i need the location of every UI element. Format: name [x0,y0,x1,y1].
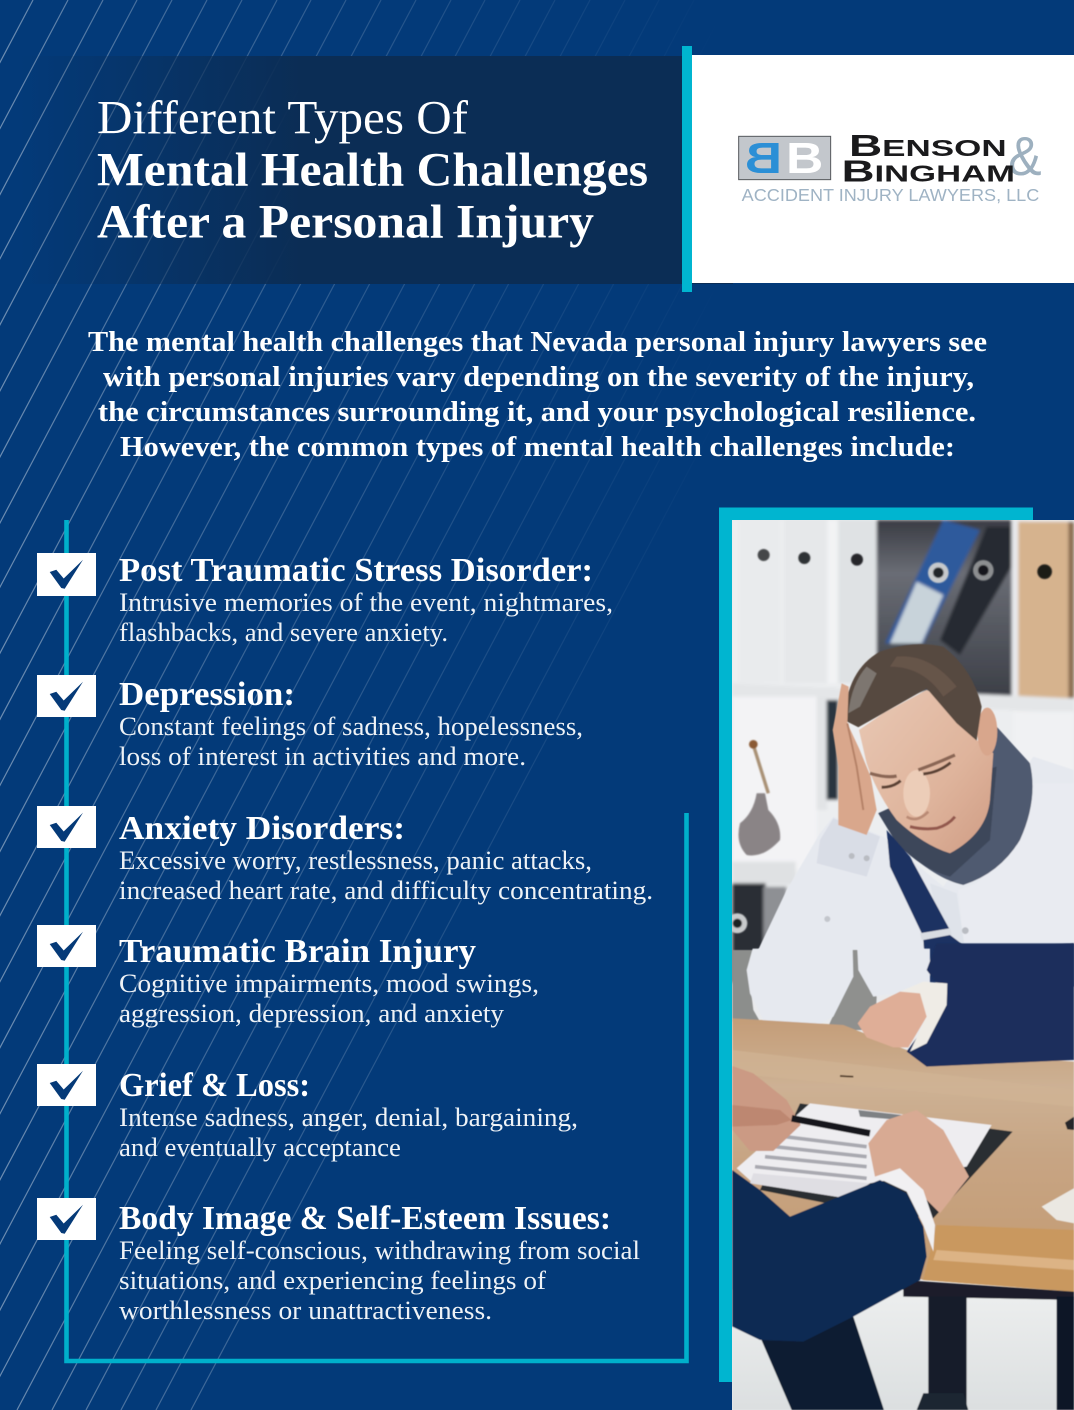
intro paragraph: However, the common types of mental health challenges include: [120,431,955,463]
item: Traumatic Brain Injury: Cognitive impairments, mood swings, [119,968,539,998]
intro paragraph: the circumstances surrounding it, and your psychological resilience. [98,396,976,428]
item: Traumatic Brain Injury: aggression, depression, and anxiety [119,998,505,1028]
shirt cuff [875,1168,935,1252]
checkbox icon [37,553,96,596]
jacket [760,1317,884,1410]
checkbox icon [37,675,96,717]
logo: Benson & Bingham: BINGHAM [842,155,1015,189]
chair background [732,950,760,1022]
item: Body Image & Self-Esteem Issues: Body Image & Self-Esteem Issues: [119,1200,611,1237]
logo: Benson & Bingham: B [786,134,823,183]
logo: Benson & Bingham: B [745,134,782,183]
logo: Benson & Bingham: ACCIDENT INJURY LAWYERS, LLC [742,185,1039,205]
neck brace [878,727,1033,885]
intro paragraph: The mental health challenges that Nevada personal injury lawyers see [88,326,987,358]
item: Post Traumatic Stress Disorder [37,552,613,647]
hair [844,644,982,741]
item: Anxiety Disorders: Anxiety Disorders: [119,810,405,847]
title: Mental Health Challenges [97,144,648,196]
photo: injured man in neck brace with lawyer [727,520,1074,1410]
shirt [758,758,1073,950]
sling [907,943,1074,1067]
item: Depression: Constant feelings of sadness, hopelessness, [119,711,583,741]
item: Body Image & Self-Esteem Issues: worthlessness or unattractiveness. [119,1295,492,1325]
left hand with pen [732,1066,801,1151]
lawyer hand [868,1110,969,1213]
item: Grief & Loss [37,1064,578,1162]
item: Depression: loss of interest in activities and more. [119,741,526,771]
floor [732,1290,1074,1410]
clipboard [760,1103,1013,1218]
table scene [732,943,1074,1410]
title: Different Types Of [97,92,468,144]
item: Body Image & Self-Esteem Issues: situations, and experiencing feelings of [119,1265,546,1295]
item: Body Image & Self-Esteem Issues: Feeling self-conscious, withdrawing from social [119,1235,640,1265]
item: Traumatic Brain Injury: Traumatic Brain Injury [119,933,476,970]
cast [908,981,948,1052]
intro paragraph: with personal injuries vary depending on the severity of the injury, [103,361,974,393]
item: Anxiety Disorders: Excessive worry, restlessness, panic attacks, [119,845,592,875]
item: Depression [37,675,583,771]
logo panel [682,46,1074,292]
strap [887,830,950,937]
shelves background [732,520,1074,987]
item: Post Traumatic Stress Disorder: flashbacks, and severe anxiety. [119,617,448,647]
keyboard and phone [1042,1188,1074,1223]
face [859,690,993,853]
logo: Benson & Bingham: & [1008,125,1042,187]
item: Post Traumatic Stress Disorder: Post Traumatic Stress Disorder: [119,552,593,589]
item: Grief & Loss: Grief & Loss: [119,1067,310,1104]
item: Grief & Loss: and eventually acceptance [119,1132,401,1162]
hand on head [833,683,877,835]
table legs [928,1297,967,1410]
client hand [858,992,927,1047]
intro paragraph [88,326,987,463]
logo: Benson & Bingham [739,125,1042,205]
checkbox icon [37,1198,96,1240]
header panel [0,56,733,284]
item: Grief & Loss: Intense sadness, anger, denial, bargaining, [119,1102,578,1132]
item: Anxiety Disorders [37,806,653,905]
item: Traumatic Brain Injury [37,925,539,1028]
item: Depression: Depression: [119,676,295,713]
item: Post Traumatic Stress Disorder: Intrusive memories of the event, nightmares, [119,587,613,617]
item: Body Image & Self-Esteem Issues [37,1198,640,1325]
item: Anxiety Disorders: increased heart rate, and difficulty concentrating. [119,875,653,905]
checkbox icon [37,806,96,848]
man: injured client [753,644,1074,987]
list frame [66,520,686,1361]
checkbox icon [37,1064,96,1106]
title: After a Personal Injury [97,196,594,248]
logo: Benson & Bingham: BENSON [849,129,1007,163]
binder holes and vase [727,549,1052,933]
table top [732,1018,1074,1292]
photo frame [726,514,1033,1382]
checkbox icon [37,925,96,967]
white sleeve [746,948,854,1024]
title [97,92,648,248]
